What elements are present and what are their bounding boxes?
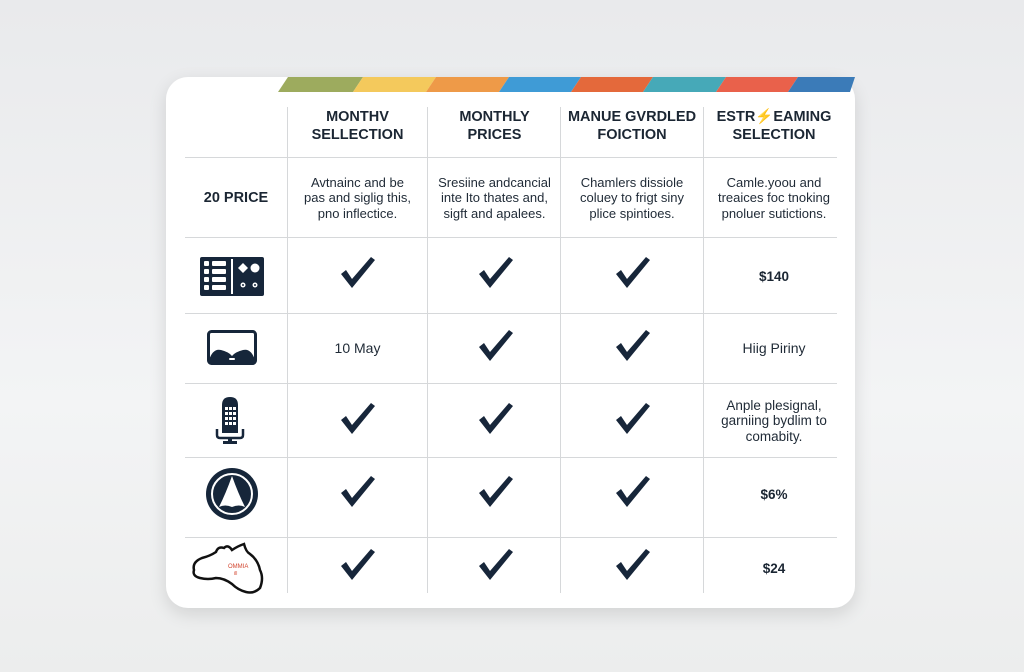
text block: column 3 description: Chamlers dissiole <box>581 175 683 190</box>
header: column 3: MANUE GVRDLED <box>568 109 696 125</box>
header: column 3 <box>568 109 696 143</box>
icon: australia map: OMMIA <box>228 564 248 570</box>
icon: tv screen <box>207 330 257 365</box>
cell: 10 May: 10 May <box>335 340 380 356</box>
text block: column 4 description: pnoluer sutictions. <box>722 206 826 221</box>
text block: column 3 description <box>580 175 684 221</box>
text block: column 3 description: coluey to frigt siny <box>580 190 684 205</box>
header: column 4: ESTR⚡EAMING <box>717 109 831 125</box>
text block: column 2 description: sigft and apalees. <box>444 206 545 221</box>
header: column 4 <box>717 108 831 143</box>
header: column 2: MONTHLY <box>459 109 530 125</box>
text block: column 1 description: Avtnainc and be <box>311 175 404 190</box>
text block: column 3 description: plice spintioes. <box>589 206 675 221</box>
text block: column 1 description <box>304 175 411 221</box>
text block: column 2 description: Sresiine andcancial <box>438 175 551 190</box>
card: comparison table <box>166 77 855 608</box>
header: column 2 <box>459 109 530 143</box>
header: column 4: SELECTION <box>732 127 815 143</box>
color stripe <box>278 77 855 92</box>
header: column 2: PRICES <box>467 127 521 143</box>
icon: control panel <box>200 257 264 296</box>
header: column 1: MONTHV <box>326 109 389 125</box>
text block: column 1 description: pas and siglig this, <box>304 190 411 205</box>
text block: column 4 description: treaices foc tnoking <box>718 190 830 205</box>
header: column 1 <box>312 109 403 143</box>
icon: remote microphone <box>216 397 244 444</box>
header: column 3: FOICTION <box>597 127 667 143</box>
icon: australia map <box>192 542 264 594</box>
cell: $6%: $6% <box>760 486 788 502</box>
header: column 1: SELLECTION <box>312 127 403 143</box>
text block: column 1 description: pno inflectice. <box>318 206 397 221</box>
cell: ample description <box>721 398 827 444</box>
cell: ample description: Anple plesignal, <box>726 398 822 413</box>
text block: column 4 description <box>718 175 830 221</box>
icon: circle emblem <box>206 468 258 520</box>
row label: 20 price: 20 PRICE <box>204 190 268 206</box>
cell: high pricing: Hiig Piriny <box>742 340 806 356</box>
cell: $140: $140 <box>759 268 789 284</box>
cell: $24: $24 <box>763 560 785 576</box>
cell: ample description: garniing bydlim to <box>721 413 827 428</box>
text block: column 2 description: inte Ito thates and, <box>441 190 548 205</box>
icon: australia map: ill <box>234 571 237 577</box>
text block: column 2 description <box>438 175 551 221</box>
text block: column 4 description: Camle.yoou and <box>727 175 821 190</box>
cell: ample description: comabity. <box>746 429 802 444</box>
